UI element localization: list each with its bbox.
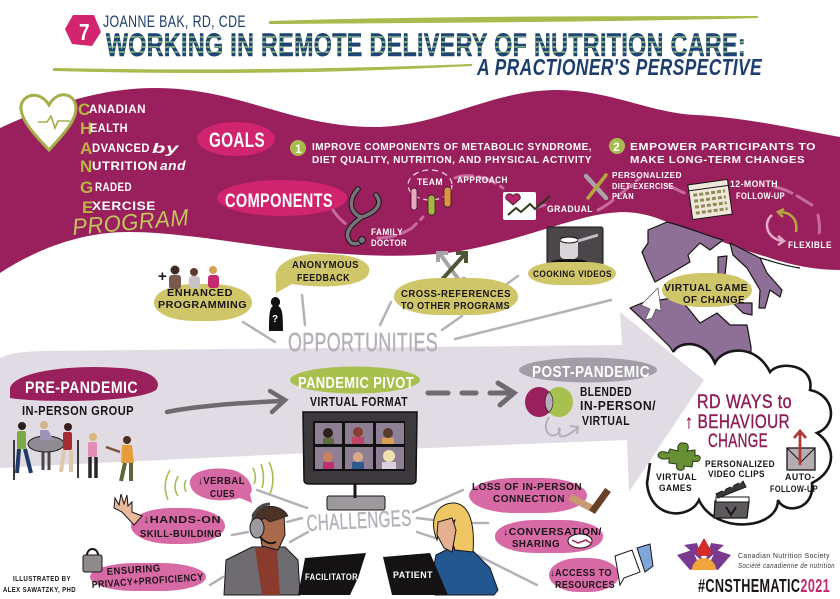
label: personalized video clips: PERSONALIZED xyxy=(705,459,775,470)
anonymous feedback: ANONYMOUS xyxy=(292,260,359,271)
label: flexible: FLEXIBLE xyxy=(788,240,832,250)
illustration: monitor xyxy=(303,412,417,510)
label: in-person group: IN-PERSON GROUP xyxy=(22,404,134,418)
icon: loop arrow xyxy=(546,417,578,436)
program name: ANADIAN xyxy=(89,104,146,116)
label: auto follow-up: AUTO- xyxy=(785,472,815,483)
ensuring privacy xyxy=(83,549,206,591)
label: gradual: GRADUAL xyxy=(547,204,593,215)
heading: challenges: CHALLENGES xyxy=(306,505,412,536)
program name: G xyxy=(80,178,94,197)
label: family doctor: FAMILY xyxy=(371,227,403,238)
enhanced programming: + xyxy=(158,268,167,285)
label: auto follow-up xyxy=(770,472,818,495)
arrow: pivot to post-pandemic xyxy=(428,383,514,405)
laptop: facilitator xyxy=(298,553,366,595)
label: goals: GOALS xyxy=(209,129,265,152)
access to resources: RESOURCES xyxy=(555,580,615,591)
program name: RADED xyxy=(95,182,132,194)
label: personalized video clips xyxy=(705,459,775,480)
label: personalized plan: PERSONALIZED xyxy=(612,170,682,180)
icon: session number hexagon xyxy=(65,15,101,46)
loss of connection: LOSS OF IN-PERSON xyxy=(472,482,582,493)
icon: venn xyxy=(525,387,573,417)
heading: opportunities: OPPORTUNITIES xyxy=(288,327,438,357)
verbal cues: ↓VERBAL xyxy=(198,476,245,487)
ensuring privacy: ENSURING xyxy=(106,563,161,578)
label: components: COMPONENTS xyxy=(225,191,333,212)
conversation sharing: ↓CONVERSATION/ xyxy=(503,527,602,538)
logo: Canadian Nutrition Society: Canadian Nutrition Society xyxy=(738,551,830,560)
cross-references: CROSS-REFERENCES xyxy=(401,289,511,300)
goal 1: 1 xyxy=(295,142,302,156)
laptop: facilitator: FACILITATOR xyxy=(305,572,358,583)
verbal cues: CUES xyxy=(210,489,235,500)
loss of connection: CONNECTION xyxy=(493,494,565,505)
label: blended: IN-PERSON/ xyxy=(580,399,656,413)
hands-on skill-building: SKILL-BUILDING xyxy=(140,528,222,540)
goal 2 xyxy=(609,138,816,166)
program name: by xyxy=(152,140,180,156)
virtual game of change xyxy=(641,273,752,320)
label: 12-month follow-up: 12-MONTH xyxy=(730,179,778,190)
goal 1 xyxy=(290,140,592,166)
program name: PROGRAM xyxy=(71,204,190,240)
laptop: patient: PATIENT xyxy=(393,570,433,581)
access to resources xyxy=(549,544,653,592)
enhanced programming: PROGRAMMING xyxy=(158,299,247,311)
panel: CHANGE program band xyxy=(0,88,840,273)
cloud content xyxy=(656,392,818,518)
virtual game of change: VIRTUAL GAME xyxy=(664,283,748,294)
program name: XERCISE xyxy=(92,201,156,213)
cloud: RD ways to behaviour change (outline) xyxy=(647,344,831,524)
label: pandemic pivot: PANDEMIC PIVOT xyxy=(298,375,414,392)
hashtag: #CNSTHEMATIC2021 xyxy=(698,576,830,596)
conversation sharing: SHARING xyxy=(512,539,560,550)
virtual game of change: OF CHANGE xyxy=(683,295,745,306)
post-pandemic xyxy=(519,358,657,436)
team approach: APPROACH xyxy=(457,175,508,186)
icon: gradual chart xyxy=(503,192,550,220)
logo: Canadian Nutrition Society xyxy=(677,538,835,570)
label: post-pandemic: POST-PANDEMIC xyxy=(532,364,650,381)
icon: stethoscope xyxy=(347,189,379,244)
label: personalized plan: PLAN xyxy=(612,191,634,201)
credit: illustrator xyxy=(3,574,76,594)
map: virtual game of change xyxy=(630,222,782,380)
components xyxy=(217,170,832,250)
label: blended xyxy=(580,385,656,428)
cooking videos xyxy=(528,227,616,285)
challenges xyxy=(83,462,653,595)
pre-pandemic xyxy=(10,367,158,481)
hands-on skill-building: ↓HANDS-ON xyxy=(143,514,221,526)
credit: illustrator: ALEX SAWATZKY, PHD xyxy=(3,585,76,594)
heading: behaviour: ↑ BEHAVIOUR xyxy=(685,412,790,433)
goal 2: 2 xyxy=(613,140,620,154)
laptop: patient xyxy=(383,553,448,595)
label: pandemic pivot xyxy=(290,366,420,394)
program name: EALTH xyxy=(90,123,128,135)
program name: H xyxy=(80,119,93,138)
label: blended: BLENDED xyxy=(580,385,632,399)
icon: crossed arrows xyxy=(438,253,466,285)
label: family doctor xyxy=(371,227,407,249)
cross-references xyxy=(394,278,518,315)
arrow: pre-pandemic to pivot xyxy=(167,391,285,412)
icon: heart xyxy=(21,95,76,150)
icon: fork and spoon xyxy=(586,175,606,198)
speaker name: JOANNE BAK, RD, CDE xyxy=(103,12,246,31)
label: 12-month follow-up: FOLLOW-UP xyxy=(736,191,785,202)
label: pre-pandemic: PRE-PANDEMIC xyxy=(25,378,138,397)
icon: flexible cycle xyxy=(767,209,796,245)
goal 2: EMPOWER PARTICIPANTS TO xyxy=(630,141,816,153)
program name: N xyxy=(80,157,93,176)
access to resources: ↓ACCESS TO xyxy=(550,568,612,579)
goal 1: DIET QUALITY, NUTRITION, AND PHYSICAL ACTIVITY xyxy=(312,154,592,166)
header xyxy=(54,12,762,80)
label: blended: VIRTUAL xyxy=(582,414,630,428)
heading: change: CHANGE xyxy=(708,431,768,452)
heading: RD ways: RD WAYS to xyxy=(697,392,792,413)
icon: puzzle piece xyxy=(658,443,700,470)
anonymous feedback xyxy=(269,254,369,331)
enhanced programming xyxy=(154,266,252,321)
program name xyxy=(71,100,190,240)
opportunities xyxy=(154,227,752,357)
goals xyxy=(197,122,816,166)
program name: E xyxy=(82,198,94,217)
team approach xyxy=(408,170,508,215)
illustration: patient xyxy=(433,503,498,595)
program name: A xyxy=(80,139,93,158)
enhanced programming: ENHANCED xyxy=(167,287,233,299)
goal 1: IMPROVE COMPONENTS OF METABOLIC SYNDROME, xyxy=(312,141,592,153)
label: virtual games xyxy=(656,472,697,494)
arrow background: timeline xyxy=(0,312,704,492)
label: personalized plan xyxy=(612,170,682,201)
pandemic pivot xyxy=(290,366,420,510)
icon: clapperboard xyxy=(714,480,749,518)
icon: envelope with arrow xyxy=(787,431,815,470)
label: personalized plan: DIET-EXERCISE xyxy=(612,181,674,191)
label: family doctor: DOCTOR xyxy=(371,238,407,249)
illustration: group at table xyxy=(14,421,134,481)
goal 2: MAKE LONG-TERM CHANGES xyxy=(630,154,805,166)
anonymous feedback: ? xyxy=(272,314,279,325)
cooking videos: COOKING VIDEOS xyxy=(533,269,612,280)
anonymous feedback: FEEDBACK xyxy=(297,273,350,284)
label: components xyxy=(217,180,347,216)
cross-references: TO OTHER PROGRAMS xyxy=(401,301,510,312)
loss of connection xyxy=(469,478,608,513)
label: auto follow-up: FOLLOW-UP xyxy=(770,484,818,495)
label: personalized video clips: VIDEO CLIPS xyxy=(708,469,765,480)
team approach: TEAM xyxy=(417,177,443,188)
hands-on skill-building xyxy=(114,494,225,544)
label: virtual games: VIRTUAL xyxy=(656,472,697,483)
icon: calendar xyxy=(688,179,732,220)
ensuring privacy: PRIVACY+PROFICIENCY xyxy=(91,572,204,591)
conversation sharing xyxy=(495,520,603,553)
label: 12-month follow-up xyxy=(730,179,785,202)
illustration: facilitator xyxy=(224,504,300,595)
program name: UTRITION xyxy=(92,161,158,173)
label: virtual games: GAMES xyxy=(659,483,692,494)
icon: session number hexagon: 7 xyxy=(79,19,90,45)
label: pre-pandemic xyxy=(10,367,158,401)
label: virtual format: VIRTUAL FORMAT xyxy=(310,395,408,409)
program name: DVANCED xyxy=(92,143,150,155)
verbal cues xyxy=(165,462,273,503)
program name: and xyxy=(160,158,187,173)
program name: C xyxy=(78,100,91,119)
credit: illustrator: ILLUSTRATED BY xyxy=(13,574,71,583)
label: goals xyxy=(197,122,275,156)
